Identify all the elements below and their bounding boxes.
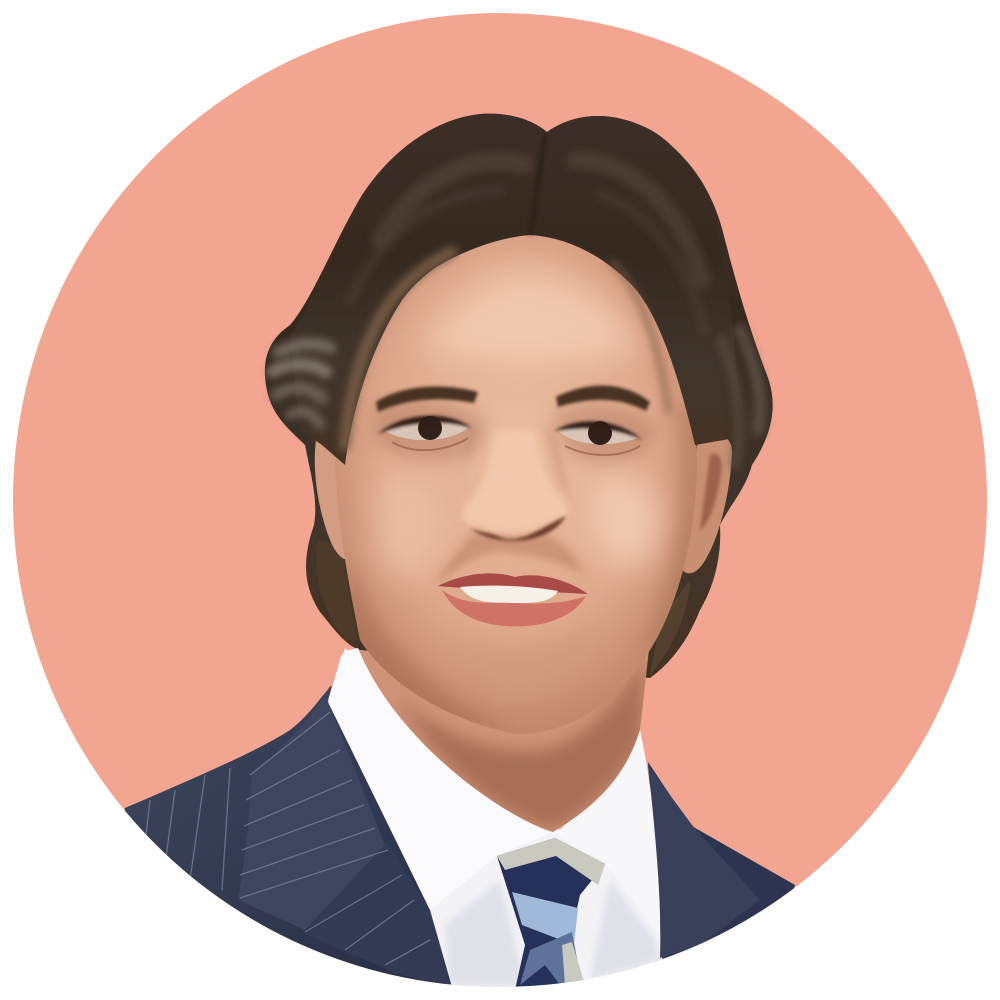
- hair: back: [265, 114, 773, 678]
- shirt shade: [445, 880, 660, 985]
- suit: right: [648, 762, 795, 962]
- shirt collar: left: [328, 648, 552, 910]
- ear: right: [680, 435, 732, 573]
- ear: left: [314, 440, 345, 560]
- mouth: [438, 573, 588, 626]
- face: [335, 235, 697, 734]
- face shading: [340, 270, 705, 730]
- suit: left: [124, 685, 450, 984]
- eyebrow: right: [556, 386, 650, 411]
- eye: right: [554, 421, 642, 455]
- shirt collar: right: [553, 730, 660, 936]
- hair: front: [272, 114, 760, 465]
- person: [100, 114, 795, 1000]
- shirt: [328, 648, 665, 1000]
- suit lapel: left: [238, 686, 385, 930]
- hair: centre part: [530, 135, 545, 235]
- eye: left: [378, 416, 472, 450]
- necktie: [497, 838, 605, 990]
- hair: grey highlights at the sides: [272, 330, 760, 465]
- eyebrow: left: [376, 387, 478, 412]
- neck shadow: [395, 650, 645, 830]
- nose: [460, 430, 567, 541]
- neck: [358, 640, 650, 832]
- hair: lower side locks: [316, 540, 690, 675]
- suit lapel: right: [648, 765, 760, 958]
- hair: fringe strands: [345, 160, 705, 445]
- pinstripes: [146, 712, 430, 966]
